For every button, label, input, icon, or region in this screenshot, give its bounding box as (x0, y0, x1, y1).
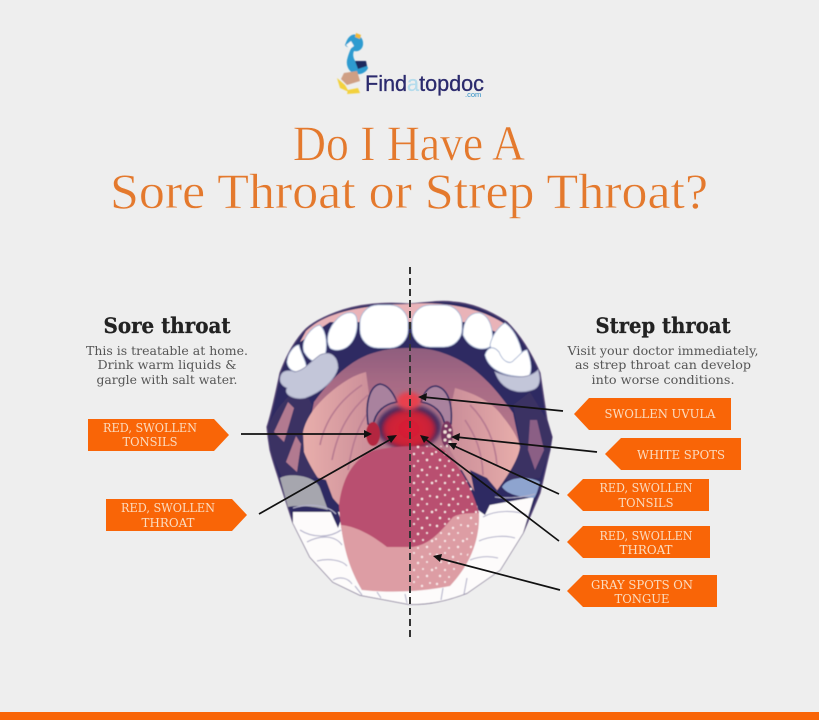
label: left red swollen throat: THROAT (142, 516, 194, 530)
labels (88, 398, 741, 607)
illustration: open mouth (267, 301, 552, 604)
lower gray molar left (280, 475, 328, 510)
label: gray spots on tongue: GRAY SPOTS ON (591, 578, 693, 592)
gray spots on tongue (411, 446, 480, 588)
upper gums (300, 303, 512, 342)
lower blue molar right (502, 478, 540, 498)
arrow: left throat (259, 435, 397, 514)
label: left red swollen tonsils: RED, SWOLLEN (103, 421, 197, 435)
label: white spots: WHITE SPOTS (637, 448, 725, 462)
navy edge right of tongue (470, 470, 497, 515)
label: right red swollen throat (567, 526, 710, 558)
mouth base (267, 301, 552, 604)
panel: sore throat text (86, 313, 248, 387)
left cheek navy (268, 385, 337, 510)
label: gray spots on tongue (567, 575, 717, 607)
text: strep throat advice: Visit your doctor immediately, (566, 343, 758, 358)
label: right red swollen tonsils: RED, SWOLLEN (600, 481, 692, 495)
arrow: right throat (420, 435, 559, 541)
heading: sore throat: Sore throat (104, 313, 231, 338)
text: sore throat advice: This is treatable at home. (86, 343, 248, 358)
arrow: gray spots (433, 554, 560, 590)
soft palate (300, 348, 525, 470)
right cheek streaks (528, 420, 544, 470)
arrow: white spots (451, 433, 597, 452)
navy edge left of tongue (315, 477, 341, 528)
left cheek folds (320, 385, 370, 470)
throat shadow (377, 405, 441, 449)
left cheek (303, 372, 376, 505)
text: strep throat advice: into worse conditions. (592, 372, 734, 387)
upper teeth (287, 305, 531, 377)
label: left red swollen throat: RED, SWOLLEN (121, 501, 215, 515)
label: left red swollen tonsils (88, 419, 229, 451)
white spots on tonsil (443, 425, 453, 447)
palate arch left (367, 384, 397, 426)
swollen tonsil left (366, 422, 380, 446)
heading: strep throat: Strep throat (596, 313, 731, 338)
text: sore throat advice (86, 343, 248, 387)
text: strep throat advice (566, 343, 758, 387)
right cheek navy (484, 392, 552, 508)
text: sore throat advice: gargle with salt water. (96, 372, 238, 387)
arrows (241, 393, 597, 590)
label: gray spots on tongue: TONGUE (614, 592, 670, 606)
tongue (339, 446, 479, 590)
divider: dashed center line (409, 267, 411, 640)
panel: strep throat text (566, 313, 758, 387)
lower tooth seams (293, 494, 535, 603)
swollen uvula (397, 392, 421, 410)
label: right red swollen tonsils: TONSILS (618, 496, 674, 510)
upper molars (280, 353, 540, 398)
title: Do I Have A (293, 115, 525, 171)
label: right red swollen throat: RED, SWOLLEN (600, 529, 692, 543)
logo: Findatopdoc (337, 33, 484, 99)
arrow: right tonsils (448, 443, 559, 494)
label: right red swollen tonsils (567, 479, 709, 511)
label: white spots (605, 438, 741, 470)
icon: duck mascot (337, 33, 368, 94)
title (110, 115, 708, 219)
footer bar (0, 712, 819, 720)
arrow: left tonsils (241, 430, 372, 438)
palate arch right (421, 386, 451, 426)
label: left red swollen throat (106, 499, 247, 531)
logo domain: .com (465, 90, 481, 99)
text: sore throat advice: Drink warm liquids & (98, 357, 236, 372)
text: strep throat advice: as strep throat can develop (575, 357, 751, 372)
label: swollen uvula: SWOLLEN UVULA (604, 407, 716, 421)
swollen tonsil right (441, 421, 453, 447)
logo wordmark: Findatopdoc (365, 71, 484, 96)
label: right red swollen throat: THROAT (620, 543, 672, 557)
right cheek folds (465, 405, 497, 475)
label: left red swollen tonsils: TONSILS (122, 435, 178, 449)
left cheek streaks (274, 402, 301, 472)
label: swollen uvula (574, 398, 731, 430)
title: Sore Throat or Strep Throat? (110, 163, 708, 219)
right cheek (448, 388, 520, 508)
red swollen throat (382, 409, 436, 449)
lower jaw (293, 497, 534, 604)
tongue tip (341, 513, 479, 592)
arrow: uvula (418, 393, 563, 411)
